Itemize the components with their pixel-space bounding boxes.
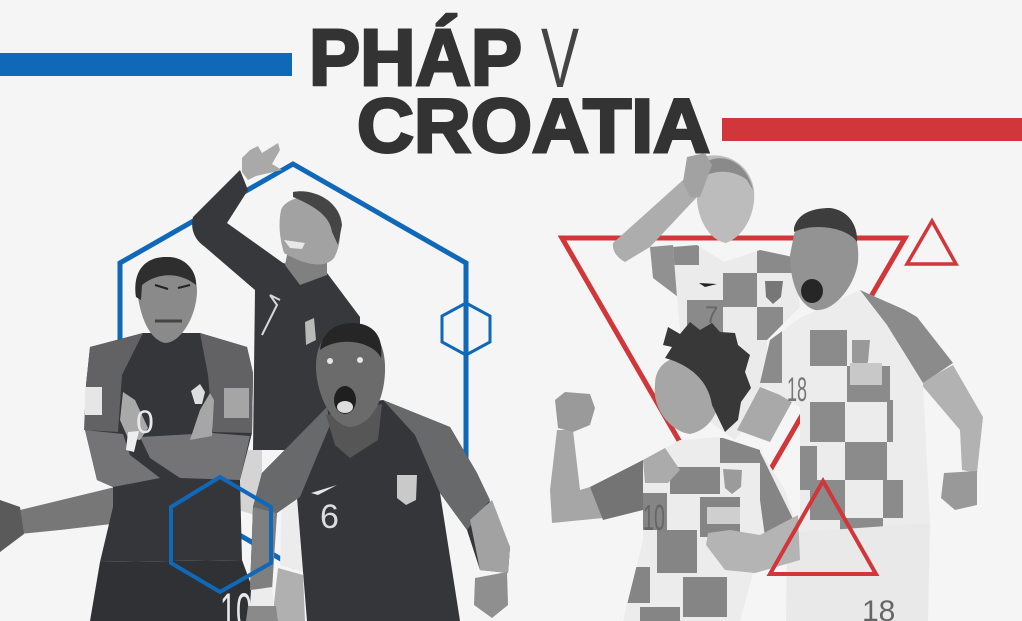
player: Rebic: 18 xyxy=(787,371,807,409)
player: Rebic xyxy=(737,208,983,621)
icon: large red triangle outline xyxy=(562,238,905,534)
icon: red triangle outline, bottom xyxy=(770,481,876,574)
player behind: shorts and leg xyxy=(238,450,312,621)
player: Modric xyxy=(550,322,800,621)
player: Pogba: 6 xyxy=(320,498,339,536)
blue title bar xyxy=(0,53,292,76)
player: Griezmann xyxy=(192,143,360,450)
player: Mbappe xyxy=(0,257,253,621)
player: Rakitic: 7 xyxy=(705,302,718,329)
player: Pogba xyxy=(246,323,510,621)
player: Rakitic xyxy=(613,153,800,440)
title: V xyxy=(541,11,579,105)
icon: blue hexagon outline, small xyxy=(442,303,490,355)
icon: red triangle outline, top right xyxy=(907,221,956,264)
icon: blue hexagon outline, bottom xyxy=(171,477,271,592)
player: Mbappe: 0 xyxy=(136,404,154,440)
title: PHÁP xyxy=(309,13,522,102)
icon: large blue hexagon outline xyxy=(120,164,466,566)
player: Modric: 10 xyxy=(643,497,665,538)
title: CROATIA xyxy=(357,84,710,169)
red title bar xyxy=(722,118,1022,141)
title xyxy=(309,11,710,169)
